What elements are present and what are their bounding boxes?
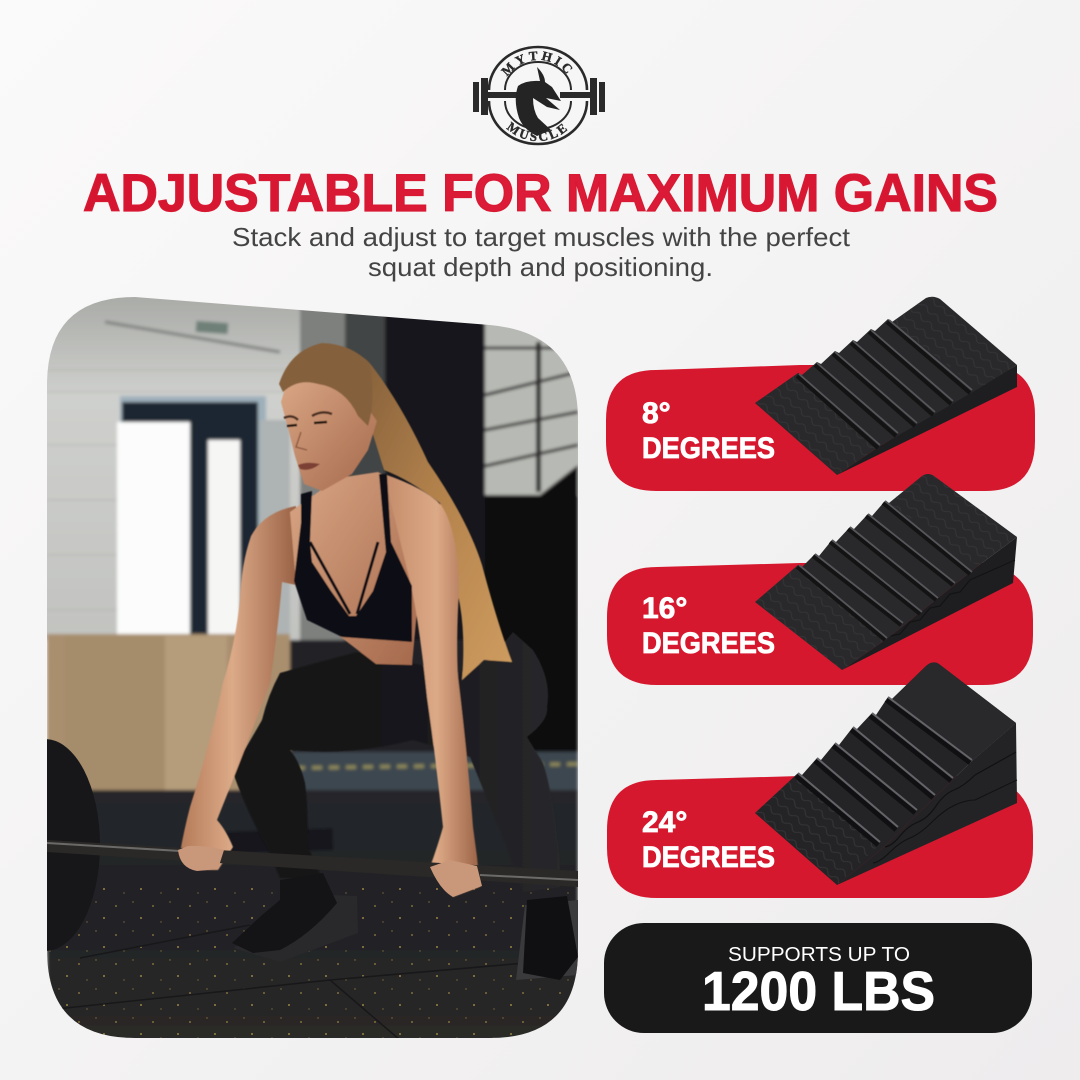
torso skin — [290, 472, 418, 665]
label: 24° — [642, 806, 687, 839]
badge caption: SUPPORTS UP TO — [728, 944, 910, 966]
logo word MUSCLE: MUSCLE — [506, 121, 568, 142]
black pill — [604, 923, 1032, 1033]
subtitle: Stack and adjust to target muscles with the perfect — [232, 222, 851, 252]
red pill — [607, 563, 1033, 685]
logo dragon — [516, 67, 561, 136]
wedge icon — [755, 474, 1017, 670]
title: ADJUSTABLE FOR MAXIMUM GAINS — [83, 164, 998, 223]
woman — [180, 343, 560, 897]
label — [642, 397, 775, 465]
wedge icon — [755, 297, 1017, 475]
card: 24 degrees — [607, 662, 1033, 898]
photo panel: woman deadlifting with squat wedge — [47, 297, 578, 1038]
legs — [232, 632, 560, 892]
card: 16 degrees — [607, 474, 1033, 685]
logo: Mythic Muscle — [473, 46, 605, 146]
weight plate — [47, 739, 100, 951]
logo ring — [489, 47, 587, 144]
right arm — [384, 474, 480, 897]
card: 8 degrees — [606, 297, 1035, 491]
label — [642, 592, 775, 660]
eyes, nose and mouth — [284, 412, 332, 470]
ponytail — [364, 358, 513, 680]
logo barbell — [473, 78, 605, 115]
left arm — [180, 506, 296, 870]
hands on bar — [178, 846, 482, 897]
label: 8° — [642, 397, 671, 430]
red pill — [607, 776, 1033, 898]
wedge icon — [755, 662, 1017, 885]
gym background — [40, 290, 580, 1050]
badge value: 1200 LBS — [702, 960, 935, 1022]
face — [281, 380, 377, 491]
capacity badge — [604, 923, 1032, 1033]
wedge under right foot — [516, 900, 578, 980]
logo word MYTHIC: MYTHIC — [500, 51, 572, 77]
label: DEGREES — [642, 627, 775, 660]
label: DEGREES — [642, 841, 775, 874]
barbell — [47, 840, 578, 887]
label: DEGREES — [642, 432, 775, 465]
wedge under left foot — [271, 901, 356, 961]
red pill — [606, 365, 1035, 491]
hair cap — [279, 343, 373, 426]
left shoe — [232, 873, 337, 953]
subtitle: squat depth and positioning. — [368, 252, 713, 282]
right shoe — [523, 896, 578, 980]
sports bra — [294, 474, 412, 642]
label: 16° — [642, 592, 687, 625]
subtitle — [232, 222, 851, 282]
label — [642, 806, 775, 874]
bra straps — [310, 542, 378, 614]
floor tile seams — [62, 924, 518, 1038]
floor specks — [49, 888, 578, 1038]
